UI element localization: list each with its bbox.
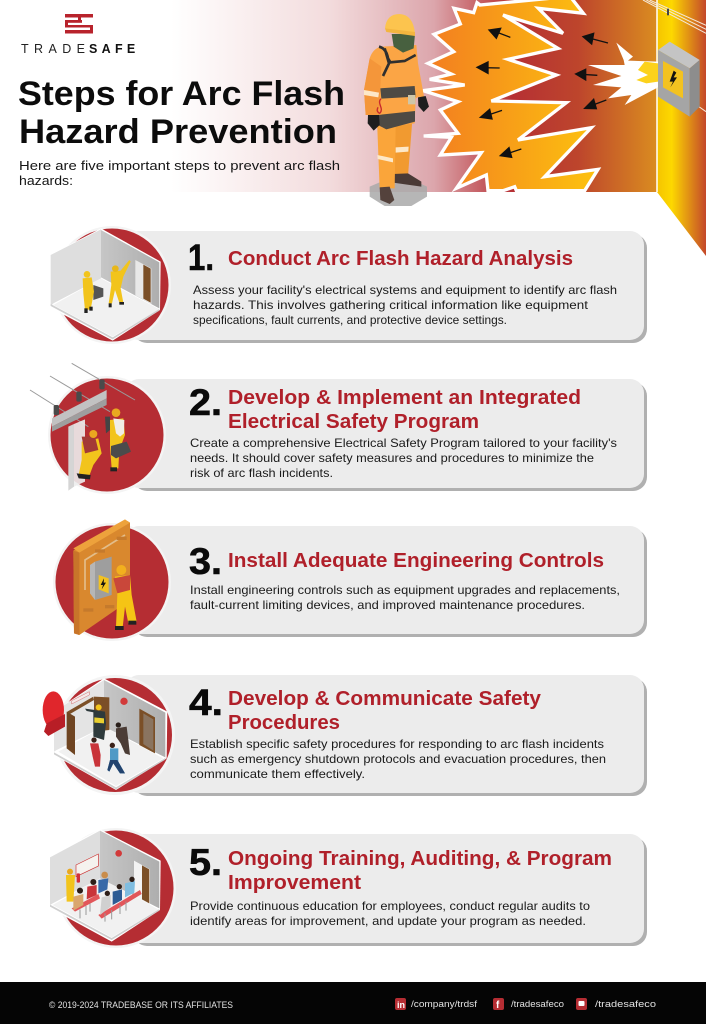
body 4: such as emergency shutdown protocols and evacuation procedures, then xyxy=(190,753,606,766)
header banner background xyxy=(0,0,657,192)
footer xyxy=(0,982,706,1024)
heading 4: Develop & Communicate Safety xyxy=(228,687,542,710)
body 2: Create a comprehensive Electrical Safety Program tailored to your facility's xyxy=(190,437,617,450)
logo wordmark: TRADE xyxy=(21,42,90,56)
body 1: specifications, fault currents, and protective device settings. xyxy=(193,314,507,327)
logo xyxy=(21,14,140,56)
copyright: © 2019-2024 TRADEBASE OR ITS AFFILIATES xyxy=(49,1000,233,1010)
number 5: 5. xyxy=(189,842,222,883)
heading 5 xyxy=(228,847,612,894)
card 4 xyxy=(125,675,647,796)
body 1: hazards. This involves gathering critical information like equipment xyxy=(193,299,589,312)
logo wordmark xyxy=(21,42,140,56)
illustration: room with two workers inspecting xyxy=(50,226,171,344)
title: Hazard Prevention xyxy=(19,113,337,151)
body 5 xyxy=(190,900,590,928)
logo mark xyxy=(65,14,93,34)
heading 4: Procedures xyxy=(228,711,340,734)
social: linkedin xyxy=(395,998,478,1010)
illustration: safety training class xyxy=(49,828,176,948)
panel: step 5 xyxy=(49,828,647,948)
electric spark xyxy=(588,43,658,105)
heading 5: Ongoing Training, Auditing, & Program xyxy=(228,847,612,870)
number 2: 2. xyxy=(189,382,222,423)
illustration: workers on electric pole xyxy=(30,363,166,494)
social: facebook: /tradesafeco xyxy=(511,999,564,1009)
social: facebook xyxy=(493,998,564,1011)
arc flash explosion xyxy=(423,0,608,191)
heading 1: Conduct Arc Flash Hazard Analysis xyxy=(228,247,573,270)
panel: step 3 xyxy=(53,519,647,641)
intro text: hazards: xyxy=(19,174,73,188)
social: linkedin: /company/trdsf xyxy=(411,999,478,1009)
body 2: risk of arc flash incidents. xyxy=(190,467,333,480)
body 2: needs. It should cover safety measures and procedures to minimize the xyxy=(190,452,594,465)
body 5: identify areas for improvement, and update your program as needed. xyxy=(190,915,586,928)
heading 2: Develop & Implement an Integrated xyxy=(228,386,581,409)
title xyxy=(18,75,345,151)
heading 2: Electrical Safety Program xyxy=(228,410,479,433)
logo wordmark: SAFE xyxy=(89,42,140,56)
panel: step 1 xyxy=(50,226,647,344)
heading 5: Improvement xyxy=(228,871,361,894)
illustration: worker at electrical panel xyxy=(53,519,171,641)
card 5 xyxy=(125,834,647,946)
body 4: Establish specific safety procedures for responding to arc flash incidents xyxy=(190,738,604,751)
body 3 xyxy=(190,584,620,612)
illustration: emergency evacuation xyxy=(43,675,175,795)
heading 4 xyxy=(228,687,542,734)
card 3 xyxy=(125,526,647,637)
number 4: 4. xyxy=(189,682,223,723)
body 3: fault-current limiting devices, and improved maintenance procedures. xyxy=(190,599,585,612)
body 3: Install engineering controls such as equipment upgrades and replacements, xyxy=(190,584,620,597)
worker in arc flash suit xyxy=(364,14,429,206)
intro text xyxy=(19,159,340,188)
panel: step 4 xyxy=(43,675,647,796)
icon: red fire alarm xyxy=(43,691,65,736)
wall with electrical panel xyxy=(588,0,706,256)
card 1 xyxy=(125,231,647,343)
body 1 xyxy=(193,284,617,327)
heading 3: Install Adequate Engineering Controls xyxy=(228,549,604,572)
social: youtube xyxy=(576,998,656,1010)
body 1: Assess your facility's electrical systems and equipment to identify arc flash xyxy=(193,284,617,297)
number 3: 3. xyxy=(189,541,222,582)
intro text: Here are five important steps to prevent arc flash xyxy=(19,159,340,173)
heading 2 xyxy=(228,386,581,433)
body 2 xyxy=(190,437,617,480)
title: Steps for Arc Flash xyxy=(18,75,345,113)
number 1: 1. xyxy=(188,237,214,278)
social: facebook: f xyxy=(496,1000,500,1011)
body 4: communicate them effectively. xyxy=(190,768,365,781)
body 5: Provide continuous education for employees, conduct regular audits to xyxy=(190,900,590,913)
card 2 xyxy=(125,379,647,491)
body 4 xyxy=(190,738,606,781)
social: linkedin: in xyxy=(397,1000,405,1010)
social: youtube: /tradesafeco xyxy=(595,999,656,1009)
panel: step 2 xyxy=(30,363,647,494)
arrows toward worker xyxy=(477,28,608,157)
